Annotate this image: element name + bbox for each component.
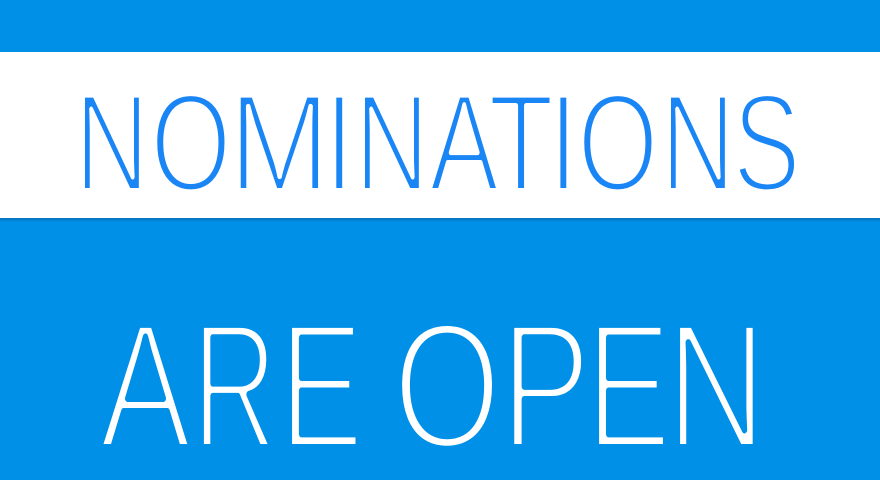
heading: ARE OPEN: N — [666, 286, 767, 480]
heading: ARE OPEN: O — [393, 286, 501, 480]
heading: ARE OPEN: E — [586, 286, 671, 480]
heading: ARE OPEN: A — [99, 286, 192, 480]
heading: ARE OPEN: P — [500, 286, 591, 480]
heading: NOMINATIONS: O — [150, 66, 231, 221]
heading: NOMINATIONS: N — [75, 66, 149, 221]
heading: NOMINATIONS: M — [228, 66, 330, 221]
heading: ARE OPEN: R — [192, 286, 277, 480]
heading: ARE OPEN: E — [279, 286, 363, 480]
heading: NOMINATIONS: I — [325, 66, 354, 221]
heading: NOMINATIONS: S — [733, 66, 801, 221]
heading: NOMINATIONS: I — [549, 66, 578, 221]
heading: NOMINATIONS: N — [661, 66, 735, 221]
heading: NOMINATIONS: A — [429, 66, 499, 221]
white banner — [0, 52, 880, 218]
heading: NOMINATIONS: O — [577, 66, 658, 221]
heading: NOMINATIONS: N — [355, 66, 429, 221]
heading: NOMINATIONS: T — [488, 66, 554, 221]
